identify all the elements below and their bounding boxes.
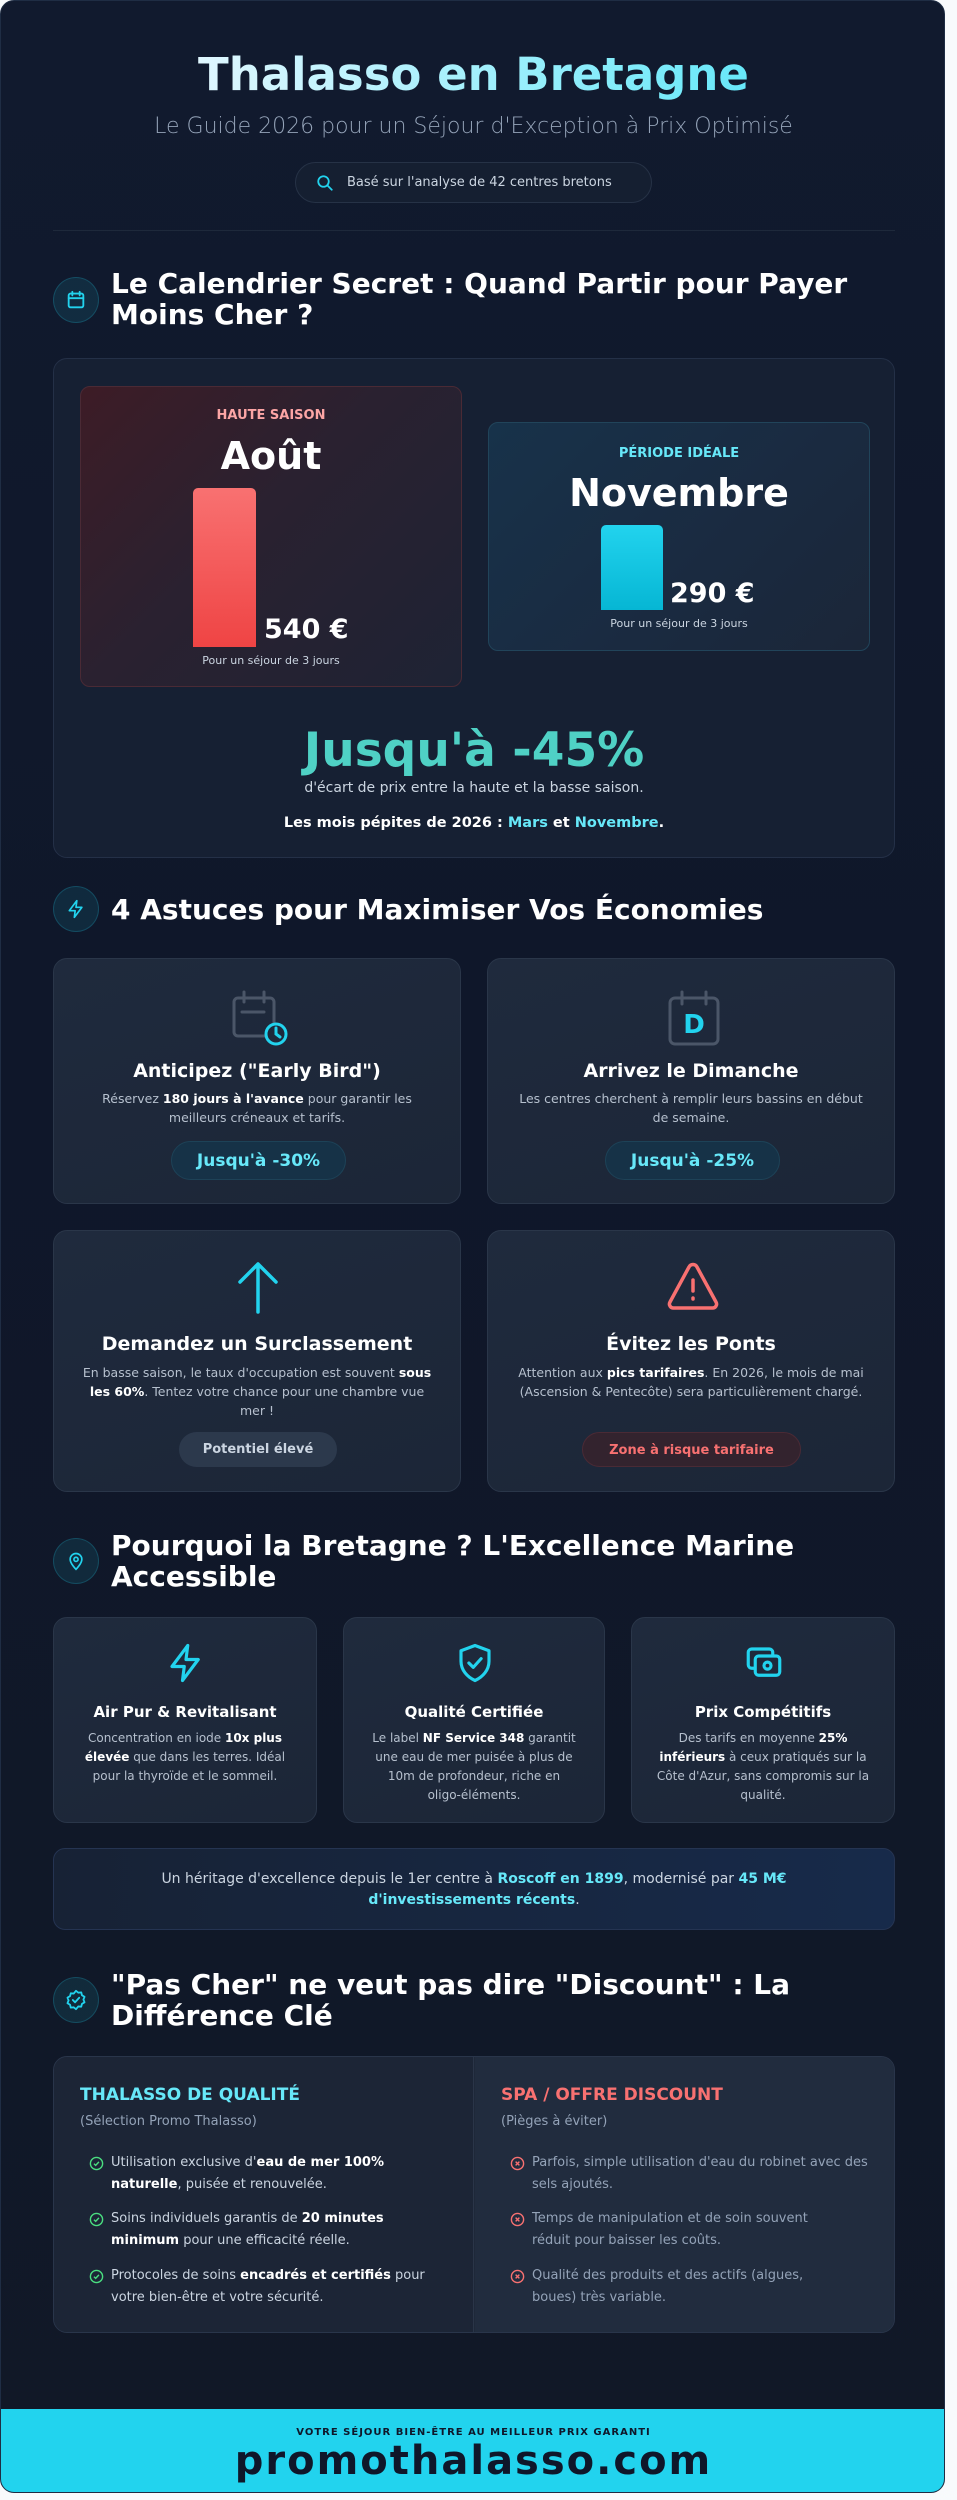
badge xyxy=(605,1141,780,1180)
title: Thalasso en Bretagne xyxy=(198,48,749,101)
card: qualité xyxy=(343,1617,605,1823)
icon: badge check xyxy=(53,1977,99,2023)
source pill xyxy=(295,162,652,203)
card: haute saison: Pour un séjour de 3 jours xyxy=(202,654,340,667)
badge: Potentiel élevé xyxy=(203,1442,313,1457)
banner: heritage: Un héritage d'excellence depuis le 1er centre à Roscoff en 1899, modernisé par 45 M€ d'investissements récents. xyxy=(161,1871,787,1908)
column: spa discount: Qualité des produits et des actifs (algues, boues) très variable. xyxy=(532,2268,803,2305)
icon: calendar D: D xyxy=(683,1010,705,1040)
icon: banknotes xyxy=(746,1647,782,1677)
tip card: early bird: Réservez 180 jours à l'avance pour garantir les meilleurs créneaux et tarifs. xyxy=(102,1091,412,1125)
column: thalasso de qualité: Soins individuels garantis de 20 minutes minimum pour une efficacité réelle. xyxy=(111,2211,384,2248)
column: spa discount: Temps de manipulation et de soin souvent réduit pour baisser les coûts. xyxy=(532,2211,808,2248)
source pill: Basé sur l'analyse de 42 centres bretons xyxy=(347,175,612,190)
column: thalasso de qualité xyxy=(54,2057,474,2334)
badge: Jusqu'à -25% xyxy=(631,1151,754,1171)
bar: 290 xyxy=(601,525,663,610)
column: thalasso de qualité: Utilisation exclusive d'eau de mer 100% naturelle, puisée et renouvelée. xyxy=(111,2155,384,2192)
card: haute saison: Août xyxy=(221,434,321,478)
heading: astuces: 4 Astuces pour Maximiser Vos Économies xyxy=(111,892,763,926)
column: thalasso de qualité: THALASSO DE QUALITÉ xyxy=(80,2085,300,2105)
icon: bolt xyxy=(53,886,99,932)
card: prix: Prix Compétitifs xyxy=(695,1703,831,1721)
tip card: early bird: Anticipez ("Early Bird") xyxy=(133,1060,381,1082)
icon: arrow up xyxy=(238,1262,278,1314)
card: air pur xyxy=(53,1617,317,1823)
card: prix: Des tarifs en moyenne 25% inférieurs à ceux pratiqués sur la Côte d'Azur, sans compromis sur la qualité. xyxy=(657,1730,869,1802)
column: thalasso de qualité: (Sélection Promo Thalasso) xyxy=(80,2114,257,2129)
card: haute saison: 540 € xyxy=(264,614,349,645)
heading: astuces xyxy=(53,886,763,932)
tip card: ponts xyxy=(487,1230,895,1492)
banner: heritage xyxy=(53,1848,895,1930)
badge xyxy=(171,1141,346,1180)
card: période idéale xyxy=(488,422,870,651)
footer: promothalasso.com xyxy=(235,2438,712,2484)
icon: calendar clock xyxy=(232,990,288,1046)
bar: 540 xyxy=(193,488,256,647)
tip card: ponts: Attention aux pics tarifaires. En 2026, le mois de mai (Ascension & Pentecôte) sera particulièrement chargé. xyxy=(518,1364,864,1398)
panel: comparison xyxy=(53,2056,895,2333)
tip card: ponts: Évitez les Ponts xyxy=(606,1333,776,1355)
tip card: surclassement xyxy=(53,1230,461,1492)
tip card: early bird xyxy=(53,958,461,1204)
card: air pur: Concentration en iode 10x plus élevée que dans les terres. Idéal pour la thyroïde et le sommeil. xyxy=(85,1730,285,1782)
card: période idéale: PÉRIODE IDÉALE xyxy=(619,446,739,461)
icon: calendar xyxy=(53,277,99,323)
card: qualité: Le label NF Service 348 garantit une eau de mer puisée à plus de 10m de profondeur, riche en oligo‑éléments. xyxy=(372,1730,576,1802)
tip card: dimanche: Arrivez le Dimanche xyxy=(583,1060,799,1082)
tip card: dimanche xyxy=(487,958,895,1204)
tip card: dimanche: Les centres cherchent à remplir leurs bassins en début de semaine. xyxy=(519,1091,863,1125)
card: période idéale: Novembre xyxy=(569,471,789,515)
card: période idéale: Pour un séjour de 3 jours xyxy=(610,617,748,630)
subtitle: Le Guide 2026 pour un Séjour d'Exception à Prix Optimisé xyxy=(154,114,793,139)
badge xyxy=(582,1432,801,1467)
footer: VOTRE SÉJOUR BIEN-ÊTRE AU MEILLEUR PRIX GARANTI xyxy=(296,2427,651,2438)
badge xyxy=(179,1432,337,1467)
card: période idéale: 290 € xyxy=(670,578,755,609)
heading: pas cher: "Pas Cher" ne veut pas dire "Discount" : La Différence Clé xyxy=(111,1968,790,2032)
card: haute saison: HAUTE SAISON xyxy=(217,408,325,423)
card: air pur: Air Pur & Revitalisant xyxy=(93,1703,277,1721)
icon: bolt xyxy=(170,1644,200,1682)
panel: calendar comparison: Les mois pépites de 2026 : Mars et Novembre. xyxy=(284,815,664,831)
column: spa discount: (Pièges à éviter) xyxy=(501,2114,607,2129)
tip card: surclassement: Demandez un Surclassement xyxy=(102,1333,412,1355)
column: spa discount xyxy=(475,2057,896,2334)
icon: shield check xyxy=(459,1644,491,1682)
badge: Jusqu'à -30% xyxy=(197,1151,320,1171)
card: prix xyxy=(631,1617,895,1823)
footer xyxy=(1,2409,946,2494)
card: haute saison xyxy=(80,386,462,687)
panel: calendar comparison: d'écart de prix entre la haute et la basse saison. xyxy=(304,780,644,796)
heading: calendrier: Le Calendrier Secret : Quand Partir pour Payer Moins Cher ? xyxy=(111,267,847,331)
card: qualité: Qualité Certifiée xyxy=(405,1703,543,1721)
panel: calendar comparison xyxy=(53,358,895,858)
icon: map pin xyxy=(53,1538,99,1584)
icon: calendar D xyxy=(668,990,720,1046)
badge: Zone à risque tarifaire xyxy=(609,1443,774,1458)
heading: bretagne: Pourquoi la Bretagne ? L'Excellence Marine Accessible xyxy=(111,1529,794,1593)
column: spa discount: SPA / OFFRE DISCOUNT xyxy=(501,2085,723,2105)
stat: -45%: Jusqu'à -45% xyxy=(304,723,644,778)
icon: warning xyxy=(668,1262,718,1310)
column: thalasso de qualité: Protocoles de soins encadrés et certifiés pour votre bien-être et votre sécurité. xyxy=(111,2268,425,2305)
column: spa discount: Parfois, simple utilisation d'eau du robinet avec des sels ajoutés. xyxy=(532,2155,868,2192)
tip card: surclassement: En basse saison, le taux d'occupation est souvent sous les 60%. Tentez votre chance pour une chambre vue mer ! xyxy=(83,1364,431,1418)
